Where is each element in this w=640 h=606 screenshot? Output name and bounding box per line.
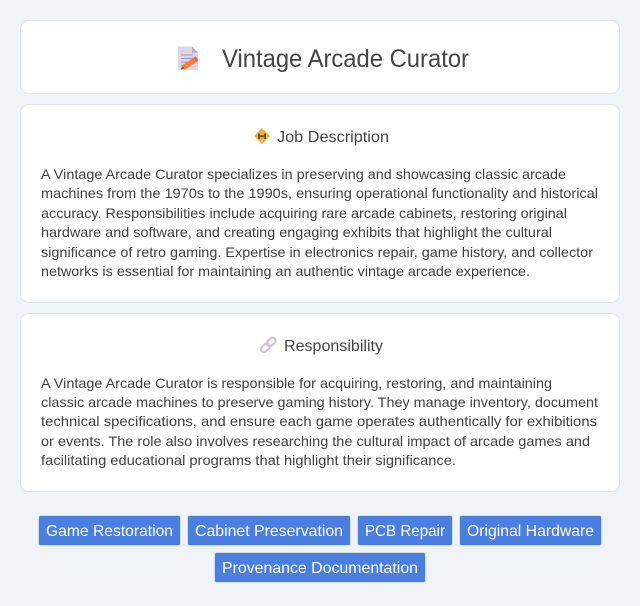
tag: provenance documentation (214, 552, 426, 582)
icon: puzzle diamond (255, 129, 269, 143)
tag: original hardware: Original Hardware (467, 523, 594, 540)
tag: game restoration (38, 516, 180, 546)
job description text: machines from the 1970s to the 1990s, ensuring operational functionality and historical (41, 185, 598, 201)
icon: link (260, 336, 277, 353)
job description text: accuracy. Responsibilities include acquiring rare arcade cabinets, restoring original (41, 205, 567, 221)
job description text (41, 166, 598, 279)
responsibility text: technical specifications, and ensure each game operates authentically for exhibitions (41, 413, 597, 429)
panel: job description (20, 104, 620, 302)
icon: document with pencil (178, 46, 198, 70)
panel: title (20, 20, 620, 94)
tag: pcb repair (358, 516, 452, 546)
tag: original hardware (460, 516, 602, 546)
tag: pcb repair: PCB Repair (365, 523, 446, 540)
responsibility text: classic arcade machines to preserve gaming history. They manage inventory, document (41, 394, 598, 410)
job description text: hardware and software, and creating engaging exhibits that highlight the cultural (41, 224, 552, 240)
job description text: A Vintage Arcade Curator specializes in preserving and showcasing classic arcade (41, 166, 566, 182)
tags (38, 516, 602, 582)
tag: provenance documentation: Provenance Documentation (222, 560, 418, 577)
title text: Vintage Arcade Curator (222, 45, 469, 73)
responsibility text: or events. The role also involves researching the cultural impact of arcade games and (41, 433, 590, 449)
heading: job description: Job Description (277, 129, 389, 146)
tag: cabinet preservation: Cabinet Preservation (195, 523, 343, 540)
responsibility text (41, 375, 598, 468)
job description text: significance of retro gaming. Expertise in electronics repair, game history, and collector (41, 244, 593, 260)
responsibility text: facilitating educational programs that highlight their significance. (41, 452, 456, 468)
job description text: networks is essential for maintaining an authentic vintage arcade experience. (41, 263, 530, 279)
heading: responsibility: Responsibility (284, 338, 383, 355)
tag: cabinet preservation (188, 516, 350, 546)
responsibility text: A Vintage Arcade Curator is responsible for acquiring, restoring, and maintaining (41, 375, 552, 391)
panel: responsibility (20, 314, 620, 492)
tag: game restoration: Game Restoration (46, 523, 173, 540)
